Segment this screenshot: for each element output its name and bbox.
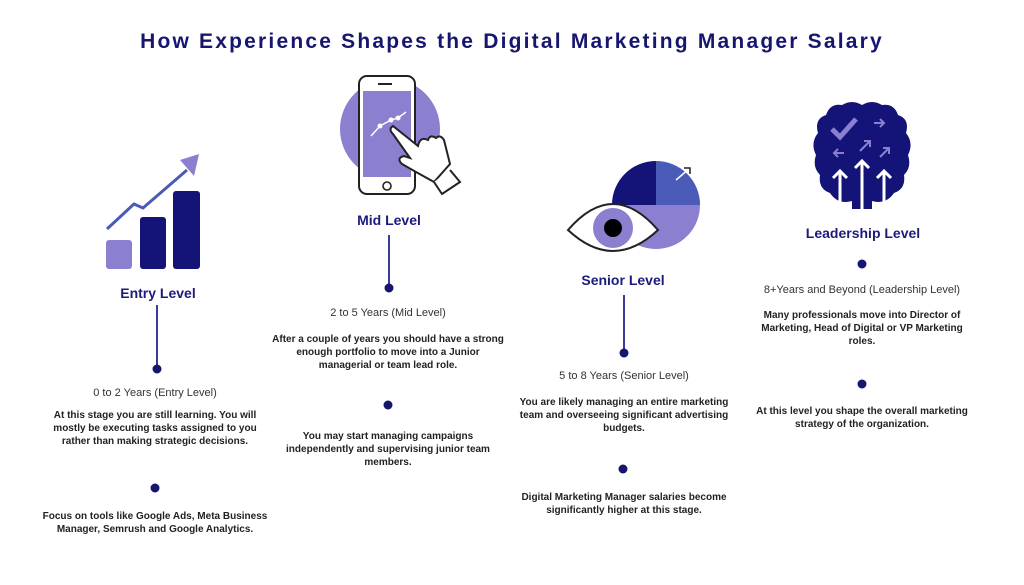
title: How Experience Shapes the Digital Marketing Manager Salary — [140, 30, 884, 53]
text block: You may start managing campaigns independently and supervising junior team members. — [286, 431, 490, 468]
heading: leadership level: Leadership Level — [806, 225, 920, 241]
icon: bar chart — [106, 154, 200, 269]
panel: leadership level — [756, 102, 968, 430]
panel: senior level — [520, 161, 728, 516]
years: 5 to 8 Years (Senior Level) — [559, 370, 689, 382]
years: 0 to 2 Years (Entry Level) — [93, 387, 217, 399]
icon: brain with arrows — [813, 102, 911, 209]
heading: mid level: Mid Level — [357, 212, 421, 228]
years: 2 to 5 Years (Mid Level) — [330, 307, 446, 319]
icon: eye and pie — [566, 161, 700, 252]
years: 8+Years and Beyond (Leadership Level) — [764, 284, 960, 296]
text block: Focus on tools like Google Ads, Meta Business Manager, Semrush and Google Analytics. — [43, 511, 267, 535]
heading: senior level: Senior Level — [581, 272, 665, 288]
text block: At this stage you are still learning. You will mostly be executing tasks assigned to you rather than making strategic decisions. — [53, 410, 257, 447]
text block: After a couple of years you should have a strong enough portfolio to move into a Junior managerial or team lead role. — [272, 334, 504, 371]
text block: You are likely managing an entire marketing team and overseeing significant advertising budgets. — [520, 397, 728, 434]
heading: entry level: Entry Level — [120, 285, 196, 301]
panel: mid level — [272, 75, 504, 468]
text block: Digital Marketing Manager salaries become significantly higher at this stage. — [521, 492, 727, 516]
text block: Many professionals move into Director of Marketing, Head of Digital or VP Marketing roles. — [761, 310, 963, 347]
text block: At this level you shape the overall marketing strategy of the organization. — [756, 406, 968, 430]
icon: phone with hand — [340, 75, 462, 196]
panel: entry level — [43, 154, 267, 535]
